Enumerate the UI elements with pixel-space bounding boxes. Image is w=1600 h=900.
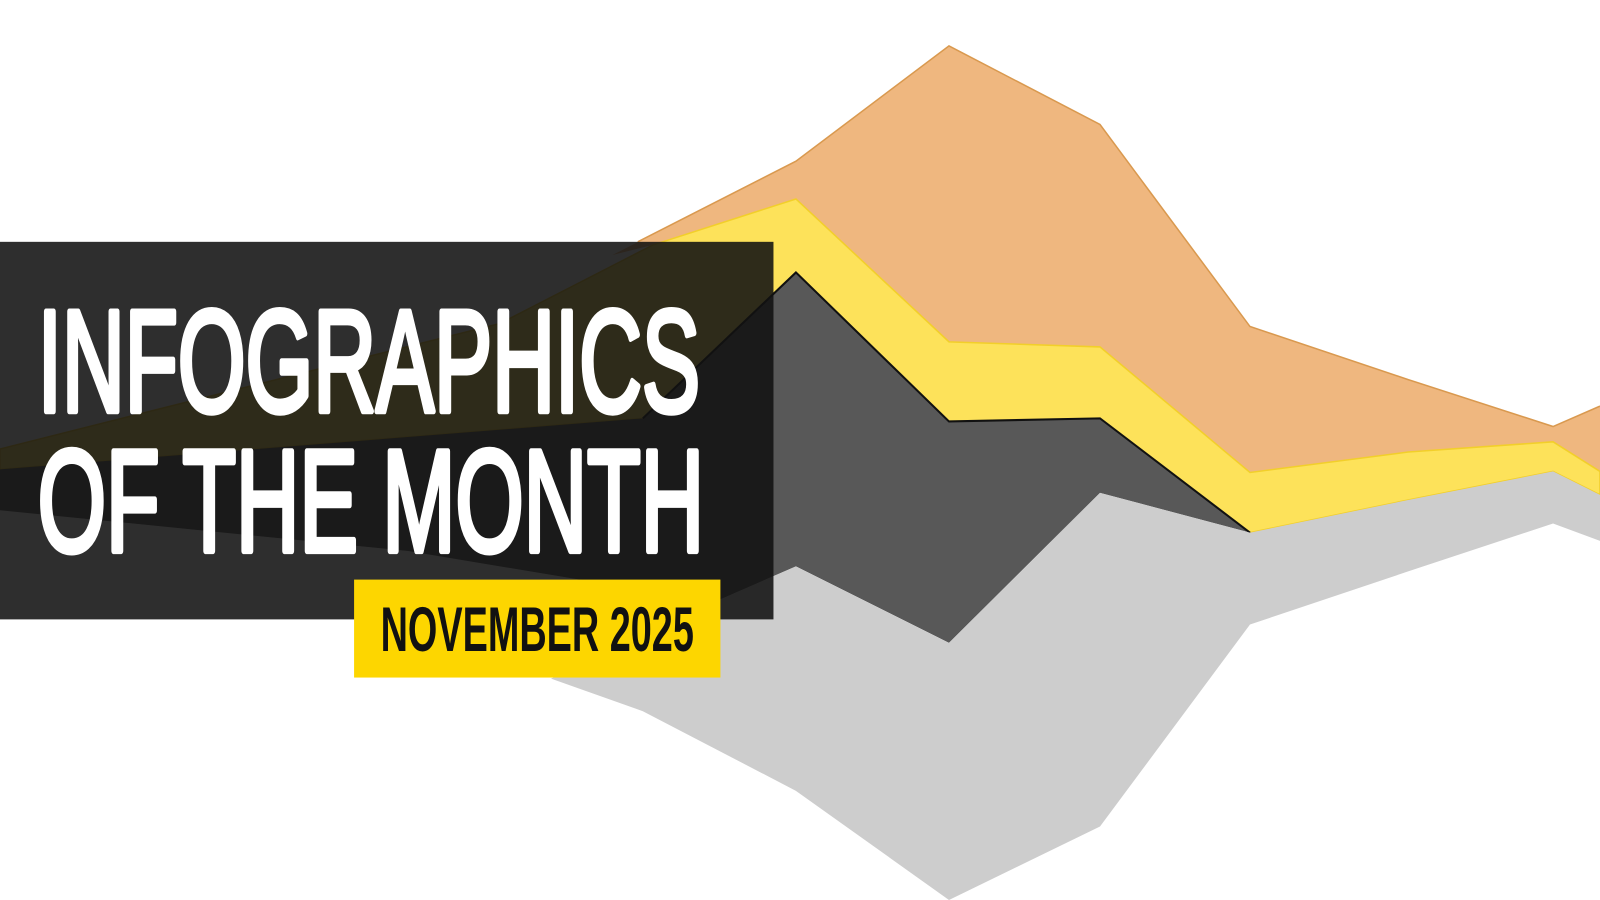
badge: date: NOVEMBER 2025	[381, 595, 694, 665]
panel: title box	[0, 242, 773, 619]
area: dark grey layer	[0, 272, 1250, 643]
title: OF THE MONTH	[38, 420, 704, 582]
area: orange layer	[612, 46, 1600, 472]
title: INFOGRAPHICS	[38, 280, 700, 442]
area: yellow layer	[0, 199, 1600, 533]
title	[38, 280, 704, 582]
badge: date	[354, 580, 720, 678]
area: light grey layer	[551, 471, 1600, 900]
